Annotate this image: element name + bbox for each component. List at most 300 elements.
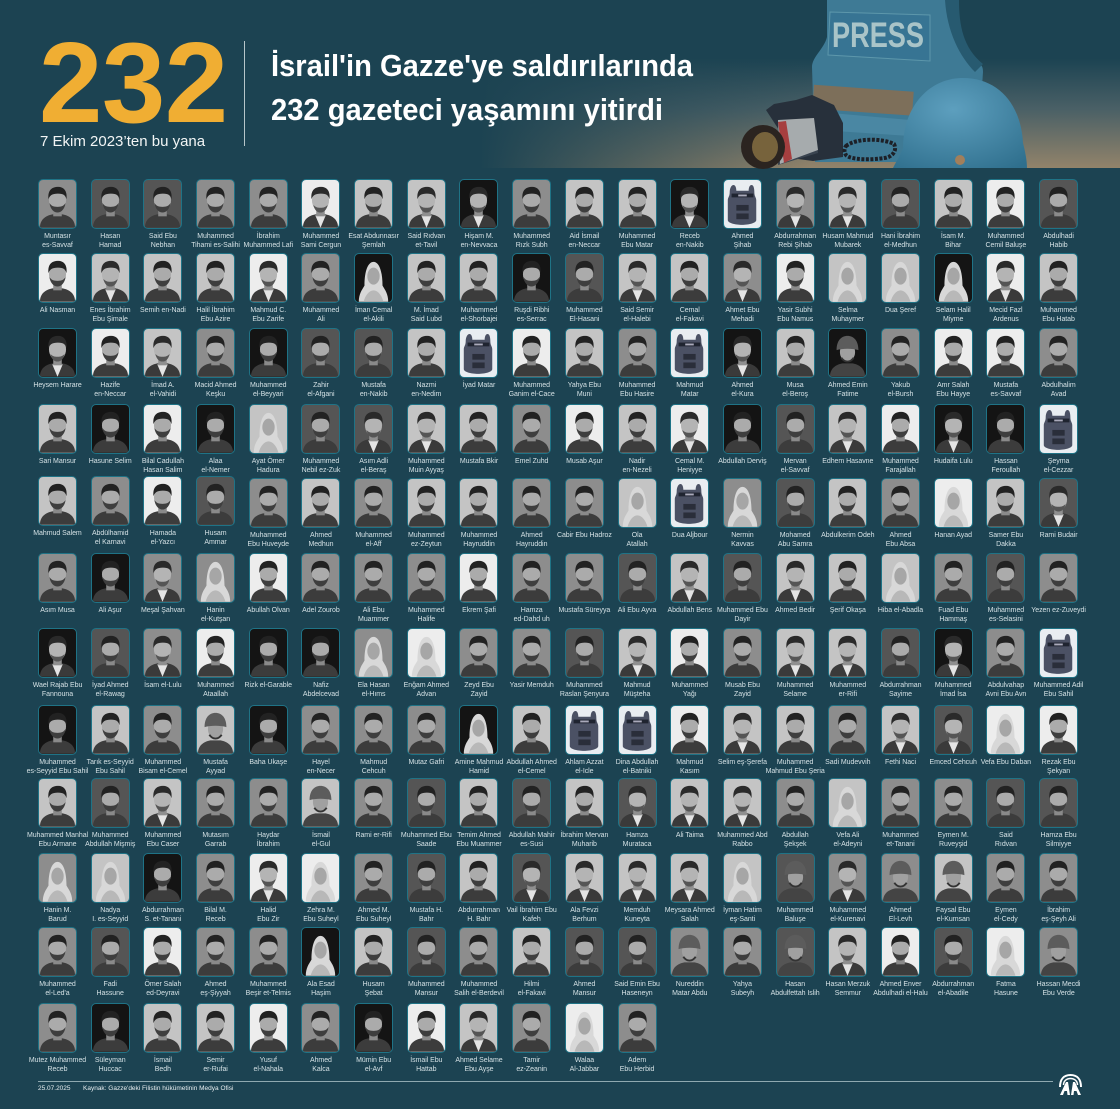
- portrait: Süleyman Huccac: Süleyman: [95, 1057, 126, 1064]
- portrait: Sari Mansur: [31, 404, 84, 474]
- portrait: İsmail Bedh: Bedh: [155, 1066, 171, 1073]
- portrait: Muhammed Ebu Matar: Muhammed: [619, 233, 655, 240]
- portrait: Ahmed Bedir: Ahmed Bedir: [775, 607, 815, 614]
- portrait: Ömer Salah ed-Deyravi: ed-Deyravi: [146, 990, 180, 997]
- portrait: Nadya I. es-Seyyid: Nadya: [100, 907, 120, 914]
- portrait: Muhammed es-Selasini: [980, 553, 1032, 623]
- portrait: Mustafa Bkir: Mustafa Bkir: [460, 458, 498, 465]
- portrait: Rami er-Rifi: [347, 778, 400, 848]
- portrait: Muhammed Ebu Hasire: Muhammed: [619, 382, 655, 389]
- portrait: Vefa Ali el-Adeyni: [821, 778, 874, 848]
- portrait: Ruşdi Ribhi es-Serrac: [512, 253, 551, 323]
- portrait: Muhammed Muin Ayyaş: Muin Ayyaş: [409, 467, 444, 474]
- portrait: Hudaifa Lulu: Hudaifa Lulu: [934, 458, 973, 465]
- portrait: Muntasır es-Savvaf: es-Savvaf: [42, 242, 73, 249]
- portrait: Faysal Ebu el-Kumsan: Faysal Ebu: [936, 907, 970, 914]
- portrait: Yusuf el-Nahala: el-Nahala: [253, 1066, 283, 1073]
- portrait: Muhammed Tihami es-Salihi: Muhammed: [197, 233, 234, 240]
- portrait: Mustafa Bkir: [453, 404, 505, 474]
- portrait: Ahmed Selame Ebu Ayşe: Ahmed Selame: [455, 1057, 503, 1064]
- portrait: İmad A. el-Vahidi: el-Vahidi: [150, 391, 176, 398]
- portrait: Esat Abdunnasır Şemlah: [348, 179, 399, 249]
- portrait: Muhammed el-Beyyari: Muhammed: [250, 382, 287, 389]
- portrait: Muhammed Manhal Ebu Armane: Ebu Armane: [38, 841, 77, 848]
- portrait: Muhammed Ebu Hatab: [1032, 253, 1085, 323]
- portrait: Muhammed et-Tanani: [874, 778, 927, 848]
- portrait: Muhammed es-Selasini: es-Selasini: [989, 616, 1023, 623]
- portrait: Amine Mahmud Hamid: [453, 705, 505, 775]
- portrait: Muhammed Selame: [769, 628, 821, 698]
- portrait: Muhammed el-Beyyari: [242, 328, 295, 398]
- portrait: Nadir en-Nezeli: Nadir: [629, 458, 645, 465]
- portrait: Abdurrahman H. Bahr: [453, 853, 505, 923]
- portrait: Zahir el-Afgani: el-Afgani: [307, 391, 335, 398]
- portrait: Husam Şebat: [347, 927, 400, 997]
- portrait: Wael Rajab Ebu Fannouna: Fannouna: [42, 691, 73, 698]
- portrait: Mustafa Ayyad: [189, 705, 242, 775]
- portrait: Hilmi el-Fakavi: Hilmi: [524, 981, 539, 988]
- portrait: Muhammed er-Rifi: Muhammed: [830, 682, 866, 689]
- portrait: Sadi Mudevvih: Sadi Mudevvih: [825, 759, 870, 766]
- portrait: Musa el-Beroş: [769, 328, 821, 398]
- portrait: Yezen ez-Zuveydi: [1032, 553, 1085, 623]
- portrait: Zehra M. Ebu Suheyl: Zehra M.: [307, 907, 335, 914]
- portrait: Muhammed Ganim el-Cace: Muhammed: [513, 382, 550, 389]
- portrait: Memduh Kuneyta: [611, 853, 663, 923]
- portrait: Nadya I. es-Seyyid: [84, 853, 137, 923]
- portrait: Hamza Ebu Silmiyye: [1032, 778, 1085, 848]
- portrait: Musa el-Beroş: el-Beroş: [782, 391, 808, 398]
- portrait: Said Semir el-Halebi: el-Halebi: [623, 316, 651, 323]
- portrait: İmad A. el-Vahidi: [137, 328, 189, 398]
- portrait: Nazmi en-Nedim: Nazmi: [417, 382, 436, 389]
- row 12: [31, 1003, 1085, 1073]
- portrait: Ali Ebu Muammer: Muammer: [358, 616, 389, 623]
- portrait: Mervan el-Savvaf: Mervan: [784, 458, 807, 465]
- portrait: Mutasım Garrab: Mutasım: [202, 832, 229, 839]
- portrait: Nadya I. es-Seyyid: I. es-Seyyid: [92, 916, 128, 923]
- portrait: Abdülhamid el Karnavi: el Karnavi: [95, 539, 126, 546]
- portrait: Abdullah Mahir es-Susi: [505, 778, 558, 848]
- portrait: Muhammed es-Selasini: Muhammed: [988, 607, 1024, 614]
- portrait: Hudaifa Lulu: [927, 404, 980, 474]
- portrait: Nermin Kavvas: Kavvas: [731, 541, 754, 548]
- portrait: Fuad Ebu Hammaş: Hammaş: [939, 616, 967, 623]
- vertical divider: [244, 41, 245, 146]
- portrait: Nafiz Abdelcevad: Nafiz: [313, 682, 329, 689]
- portrait: Abullah Olvan: [242, 553, 295, 623]
- portrait: İbrahim Mervan Muharib: Muharib: [572, 841, 597, 848]
- portrait: Ela Hasan el-Hıms: el-Hıms: [362, 691, 386, 698]
- portrait: Alaa el-Nemer: Alaa: [209, 458, 222, 465]
- portrait: Muhammed Ali: Muhammed: [303, 307, 339, 314]
- portrait: Muhammed el-Led'a: el-Led'a: [45, 990, 70, 997]
- portrait: Mustafa es-Savvaf: [980, 328, 1032, 398]
- portrait: Abdullah Şekşek: Şekşek: [784, 841, 806, 848]
- portrait: İbrahim Muhammed Lafi: Muhammed Lafi: [243, 242, 293, 249]
- portrait: İbrahim Muhammed Lafi: [243, 179, 293, 249]
- portrait: Muhammed Selame: Muhammed: [777, 682, 813, 689]
- portrait: Ahmed Medhun: [295, 478, 347, 548]
- portrait: Abdullah Ahmed el-Cemel: el-Cemel: [518, 768, 545, 775]
- portrait: Hanin M. Barud: Hanin M.: [44, 907, 71, 914]
- portrait: Muhammed Rızk Subh: Muhammed: [513, 233, 550, 240]
- portrait: Temim Ahmed Ebu Muammer: Ebu Muammer: [456, 841, 502, 848]
- portrait: Rami Budair: Rami Budair: [1040, 532, 1078, 539]
- portrait: Yahya Subeyh: Yahya: [733, 981, 752, 988]
- portrait: Hanan Ayad: [927, 478, 980, 548]
- portrait: İyad Matar: İyad Matar: [463, 382, 495, 389]
- portrait: Hasan Hamad: Hasan: [100, 233, 120, 240]
- row 10: [31, 853, 1085, 923]
- portrait: Abdurrahman el-Abadile: Abdurrahman: [932, 981, 974, 988]
- portrait: Sari Mansur: Sari Mansur: [39, 458, 76, 465]
- portrait: Ahmed Enver Abdulhadi el-Halu: Abdulhadi el-Halu: [873, 990, 928, 997]
- portrait: Husam Mahmud Mubarek: Husam Mahmud: [822, 233, 873, 240]
- portrait: Ahmed el-Kura: Ahmed: [731, 382, 753, 389]
- portrait: Mümin Ebu el-Avf: Mümin Ebu: [356, 1057, 391, 1064]
- portrait: Haydar İbrahim: [242, 778, 295, 848]
- portrait: Esat Abdunnasır Şemlah: Şemlah: [362, 242, 385, 249]
- portrait: Temim Ahmed Ebu Muammer: Temim Ahmed: [457, 832, 501, 839]
- portrait: Dua Şeref: [874, 253, 927, 323]
- portrait: İsam el-Lulu: [137, 628, 189, 698]
- portrait: İsam el-Lulu: İsam el-Lulu: [144, 682, 182, 689]
- row 2: [38, 253, 1078, 323]
- portrait: Muhammed Abd Rabbo: Rabbo: [732, 841, 753, 848]
- portrait: İsmail Bedh: İsmail: [154, 1057, 172, 1064]
- portrait: Hamza ed-Dahduh: [505, 553, 558, 623]
- portrait: Ala Esad Haşim: Haşim: [311, 990, 331, 997]
- row 9: [31, 778, 1085, 848]
- portrait: Muhammed Ebu Dayir: Muhammed Ebu: [717, 607, 768, 614]
- portrait: Muhammed İmad İsa: [927, 628, 980, 698]
- portrait: Ola Atallah: [611, 478, 663, 548]
- portrait: Ayat Ömer Hadura: Hadura: [257, 467, 280, 474]
- portrait: Rezak Ebu Şekyan: Şekyan: [1047, 768, 1070, 775]
- portrait: Muhammed Cemil Baluşe: Muhammed: [988, 233, 1024, 240]
- portrait: İbrahim eş-Şeyh Ali: İbrahim: [1047, 907, 1070, 914]
- portrait: Muhammed Hayruddin: [453, 478, 505, 548]
- portrait: Ali Ebu Muammer: [347, 553, 400, 623]
- portrait: Mecid Fazl Ardenus: [980, 253, 1032, 323]
- portrait: Walaa Al-Jabbar: [558, 1003, 611, 1073]
- portrait: Muhammed Ataallah: Ataallah: [203, 691, 228, 698]
- portrait: Vefa Ebu Daban: [980, 705, 1032, 775]
- portrait: Muhammed Mahmud Ebu Şeria: [769, 705, 821, 775]
- portrait: Süleyman Huccac: Huccac: [99, 1066, 122, 1073]
- portrait: Muhammed el-Led'a: [31, 927, 84, 997]
- portrait: Said Emin Ebu Haseneyn: [611, 927, 663, 997]
- portrait: Semir er-Rufai: [189, 1003, 242, 1073]
- portrait: Adel Zourob: Adel Zourob: [302, 607, 340, 614]
- portrait: Temim Ahmed Ebu Muammer: [453, 778, 505, 848]
- portrait: Abdullah Ahmed el-Cemel: [505, 705, 558, 775]
- portrait: Yakub el-Bursh: el-Bursh: [888, 391, 913, 398]
- portrait: Hişam M. en-Nevvaca: [459, 179, 498, 249]
- portrait: Fatma Hasune: Fatma: [996, 981, 1016, 988]
- portrait: İsmail el-Gul: İsmail: [312, 832, 330, 839]
- portrait: Yusuf el-Nahala: [242, 1003, 295, 1073]
- portrait: Muhammed Abd Rabbo: [716, 778, 769, 848]
- portrait: Muhammed Hayruddin: Muhammed: [461, 532, 497, 539]
- portrait: Muhammed Ganim el-Cace: [505, 328, 558, 398]
- portrait: Mustafa H. Bahr: [400, 853, 453, 923]
- portrait: Abdulhalim Avad: [1032, 328, 1085, 398]
- portrait: Heysem Harare: Heysem Harare: [33, 382, 82, 389]
- portrait: Ahmet Ebu Mehadi: Ahmet Ebu: [725, 307, 760, 314]
- portrait: Mahmud Matar: [663, 328, 716, 398]
- portrait: Eymen el-Cedy: el-Cedy: [994, 916, 1018, 923]
- portrait: Said Rıdvan: Said: [999, 832, 1013, 839]
- portrait: Muhammed Baluşe: [769, 853, 821, 923]
- portrait: Muhammed el-Aff: [347, 478, 400, 548]
- portrait: Yakub el-Bursh: Yakub: [891, 382, 910, 389]
- portrait: İsmail Bedh: [137, 1003, 189, 1073]
- portrait: Abdullah Şekşek: Abdullah: [782, 832, 809, 839]
- portrait: Mustafa H. Bahr: Bahr: [419, 916, 434, 923]
- portrait: Yezen ez-Zuveydi: Yezen ez-Zuveydi: [1031, 607, 1086, 614]
- portrait: Faysal Ebu el-Kumsan: el-Kumsan: [937, 916, 970, 923]
- portrait: Yakub el-Bursh: [874, 328, 927, 398]
- portrait: Ahmed Emin Fatime: Fatime: [837, 391, 858, 398]
- portrait: Said Emin Ebu Haseneyn: Said Emin Ebu: [614, 981, 660, 988]
- portrait: Muhammed Salih el-Berdevil: [453, 927, 505, 997]
- camera: [741, 95, 895, 169]
- portrait: Ala Fevzi Berhum: Berhum: [572, 916, 596, 923]
- portrait: M. İmad Said Lubd: [407, 253, 446, 323]
- portrait: Selma Muhaymer: Muhaymer: [831, 316, 864, 323]
- portrait: Asım Musa: [31, 553, 84, 623]
- portrait: Ahmed Kalca: Kalca: [312, 1066, 330, 1073]
- portrait: Said Semir el-Halebi: [618, 253, 657, 323]
- portrait: Hamza Ebu Silmiyye: Silmiyye: [1046, 841, 1071, 848]
- portrait: Muhammed el-Shorbajei: el-Shorbajei: [461, 316, 497, 323]
- portrait: Ahmed M. Ebu Suheyl: Ebu Suheyl: [356, 916, 391, 923]
- portrait: Ahlam Azzat el-Icle: [558, 705, 611, 775]
- portrait: Muhammed Beşir et-Telmis: Muhammed: [250, 981, 287, 988]
- portrait: Meysara Ahmed Salah: [663, 853, 716, 923]
- portrait: Abdullah Mahir es-Susi: es-Susi: [520, 841, 543, 848]
- portrait: Muhammed El-Hasani: Muhammed: [566, 307, 603, 314]
- portrait: Emel Zuhd: [505, 404, 558, 474]
- portrait: Nermin Kavvas: [716, 478, 769, 548]
- portrait: Bilal M. Receb: Bilal M.: [204, 907, 227, 914]
- portrait: Vefa Ali el-Adeyni: Vefa Ali: [836, 832, 859, 839]
- portrait: Muhammed Ebu Matar: [618, 179, 657, 249]
- portrait: Abdurrahman el-Abadile: el-Abadile: [938, 990, 968, 997]
- portrait: Ahmed Enver Abdulhadi el-Halu: Ahmed Enver: [880, 981, 921, 988]
- portrait: Zeyd Ebu Zayid: [453, 628, 505, 698]
- portrait: Hamada el-Yazcı: [137, 476, 189, 546]
- portrait: Receb en-Nakib: en-Nakib: [676, 242, 704, 249]
- portrait: Muhammed Ataallah: [189, 628, 242, 698]
- portrait: Tarık es-Seyyid Ebu Sahil: [84, 705, 137, 775]
- portrait: Hanin el-Kutşan: el-Kutşan: [201, 616, 230, 623]
- portrait: Eymen el-Cedy: [980, 853, 1032, 923]
- portrait: Mahmud Cehcuh: Mahmud: [360, 759, 387, 766]
- portrait: Selam Halil Miyme: [927, 253, 980, 323]
- portrait: Muhammed Rızk Subh: Rızk Subh: [516, 242, 548, 249]
- row 11: [31, 927, 1085, 997]
- portrait: Hamza Murataca: Murataca: [623, 841, 651, 848]
- portrait: Alaa el-Nemer: el-Nemer: [201, 467, 230, 474]
- portrait: Walaa Al-Jabbar: Walaa: [575, 1057, 594, 1064]
- portrait: Abdulhadi Habib: Abdulhadi: [1043, 233, 1074, 240]
- portrait: Ahmed Emin Fatime: Ahmed Emin: [828, 382, 868, 389]
- portrait: Abdulkerim Odeh: Abdulkerim Odeh: [821, 532, 874, 539]
- portrait: Receb en-Nakib: [670, 179, 709, 249]
- portrait: Abdurrahman Sayime: Abdurrahman: [880, 682, 921, 689]
- portrait: Ahmed Şihab: [723, 179, 762, 249]
- portrait: Muhammed Farajallah: [874, 404, 927, 474]
- portrait: Yasir Memduh: [505, 628, 558, 698]
- portrait: Abullah Olvan: Abullah Olvan: [247, 607, 290, 614]
- portrait: Halid Ebu Zir: Halid: [260, 907, 276, 914]
- portrait: Vail İbrahim Ebu Kafeh: [505, 853, 558, 923]
- portrait: Abdulvahap Avni Ebu Avn: Avni Ebu Avn: [985, 691, 1026, 698]
- row 8: [31, 705, 1085, 775]
- portrait: Enes İbrahim Ebu Şimale: Enes İbrahim: [90, 307, 131, 314]
- portrait: Mahmud Kasım: Mahmud: [676, 759, 703, 766]
- portrait: Abdurrahman Sayime: Sayime: [889, 691, 912, 698]
- portrait: Muhammed El-Hasani: [565, 253, 604, 323]
- portrait: Hassan Mecdi Ebu Verde: Hassan Mecdi: [1037, 981, 1080, 988]
- portrait: Fuad Ebu Hammaş: [927, 553, 980, 623]
- portrait: Mustafa en-Nakib: Mustafa: [361, 382, 386, 389]
- portrait: Ali Taima: [663, 778, 716, 848]
- portrait: Ala Fevzi Berhum: [558, 853, 611, 923]
- portrait: Husam Ammar: [189, 476, 242, 546]
- portrait: Muntasır es-Savvaf: Muntasır: [44, 233, 71, 240]
- portrait: Nazmi en-Nedim: en-Nedim: [411, 391, 441, 398]
- portrait: Ahmed eş-Şiyyah: [189, 927, 242, 997]
- portrait: Mustafa es-Savvaf: Mustafa: [994, 382, 1018, 389]
- portrait: Abdulhadi Habib: Habib: [1050, 242, 1068, 249]
- portrait: Muhammed Raslan Şenyura: Raslan Şenyura: [560, 691, 609, 698]
- portrait: Ahmed Ebu Absa: Ebu Absa: [886, 541, 915, 548]
- portrait: Yahya Ebu Muni: Muni: [577, 391, 592, 398]
- portrait: Mutez Muhammed Receb: [31, 1003, 84, 1073]
- portrait: Musab Ebu Zayid: Musab Ebu: [725, 682, 760, 689]
- portrait: İman Cemal el-Akili: İman Cemal: [355, 307, 392, 314]
- portrait: Muhammed Ali: Ali: [317, 316, 325, 323]
- portrait: Abdullah Derviş: Abdullah Derviş: [718, 458, 767, 465]
- portrait: Samer Ebu Dakka: Dakka: [996, 541, 1016, 548]
- portrait: Vefa Ali el-Adeyni: el-Adeyni: [833, 841, 862, 848]
- portrait: Hasune Selim: Hasune Selim: [89, 458, 132, 465]
- portrait: Eymen M. Ruveyşid: [927, 778, 980, 848]
- portrait: Muhammed Baluşe: Baluşe: [785, 916, 806, 923]
- portrait: Ahmed eş-Şiyyah: Ahmed: [205, 981, 227, 988]
- portrait: Muhammed Halife: Halife: [418, 616, 435, 623]
- row 6: [31, 553, 1085, 623]
- portrait: Husam Şebat: Husam: [363, 981, 385, 988]
- portrait: Faysal Ebu el-Kumsan: [927, 853, 980, 923]
- portrait: Nafiz Abdelcevad: Abdelcevad: [303, 691, 339, 698]
- portrait: Muhammed Cemil Baluşe: [986, 179, 1026, 249]
- portrait: Husam Şebat: Şebat: [365, 990, 383, 997]
- portrait: Said Semir el-Halebi: Said Semir: [620, 307, 654, 314]
- portrait: Mustafa en-Nakib: en-Nakib: [360, 391, 387, 398]
- portrait: Hasan Hamad: [91, 179, 130, 249]
- portrait: İmad A. el-Vahidi: İmad A.: [151, 382, 175, 389]
- portrait: Hasan Abdulfettah Islih: Abdulfettah Islih: [771, 990, 820, 997]
- portrait: Mohamed Abu Samra: Abu Samra: [778, 541, 812, 548]
- portrait: Muhammed Ebu Caser: [137, 778, 189, 848]
- portrait: Hassan Feroullah: Feroullah: [992, 467, 1020, 474]
- row 5: [31, 478, 1085, 548]
- portrait: Hamada el-Yazcı: el-Yazcı: [151, 539, 175, 546]
- portrait: Said Rıdvan et-Tavil: [407, 179, 446, 249]
- portrait: Ali Ebu Ayva: [611, 553, 663, 623]
- portrait: Muhammed Adil Ebu Sahil: Ebu Sahil: [1044, 691, 1073, 698]
- portrait: Hamza Murataca: Hamza: [626, 832, 648, 839]
- portrait: Muhammed Selame: Selame: [783, 691, 807, 698]
- big number: 232: [39, 20, 228, 147]
- portrait: Ali Ebu Ayva: Ali Ebu Ayva: [618, 607, 656, 614]
- portrait: Abdullah Şekşek: [769, 778, 821, 848]
- portrait: Ruşdi Ribhi es-Serrac: es-Serrac: [517, 316, 547, 323]
- portrait: M. İmad Said Lubd: Said Lubd: [411, 316, 442, 323]
- portrait: Samer Ebu Dakka: Samer Ebu: [989, 532, 1023, 539]
- portrait: Muhammed Manhal Ebu Armane: Muhammed Manhal: [27, 832, 88, 839]
- portrait: Hiba el-Abadla: Hiba el-Abadla: [878, 607, 923, 614]
- portrait: Mahmud Müşteha: Müşteha: [624, 691, 650, 698]
- portrait: Abdullah Ahmed el-Cemel: Abdullah Ahmed: [507, 759, 557, 766]
- portrait: Cabir Ebu Hadroz: Cabir Ebu Hadroz: [557, 532, 612, 539]
- portrait: Ola Atallah: Ola: [632, 532, 642, 539]
- portrait: Mohamed Abu Samra: Mohamed: [780, 532, 811, 539]
- portrait: Muhammed Abd Rabbo: Muhammed Abd: [717, 832, 768, 839]
- portrait: Ali Taima: Ali Taima: [676, 832, 704, 839]
- portrait: Muhammed Ebu Hatab: Muhammed: [1040, 307, 1077, 314]
- portrait: Mahmud Matar: Mahmud: [676, 382, 703, 389]
- portrait: Abdurrahman S. et-Tanani: S. et-Tanani: [144, 916, 181, 923]
- portrait: Ahmed El-Levh: El-Levh: [889, 916, 912, 923]
- portrait: Hanin el-Kutşan: [189, 553, 242, 623]
- portrait: Wael Rajab Ebu Fannouna: [31, 628, 84, 698]
- portrait: Ahmed Medhun: Ahmed: [310, 532, 332, 539]
- portrait: İyad Matar: [453, 328, 505, 398]
- portrait: Mahmud C. Ebu Zarife: [249, 253, 288, 323]
- portrait: Hamada el-Yazcı: Hamada: [150, 530, 176, 537]
- portrait: Fatma Hasune: Hasune: [994, 990, 1018, 997]
- portrait: Adem Ebu Herbid: [611, 1003, 663, 1073]
- portrait: Bilal M. Receb: [189, 853, 242, 923]
- portrait: Mustafa Süreyya: Mustafa Süreyya: [558, 607, 610, 614]
- portrait: Musab Ebu Zayid: [716, 628, 769, 698]
- portrait: Muhammed Ganim el-Cace: Ganim el-Cace: [509, 391, 555, 398]
- portrait: Memduh Kuneyta: Kuneyta: [624, 916, 650, 923]
- portrait: Hazife en-Neccar: [84, 328, 137, 398]
- portrait: Fadi Hassune: Hassune: [97, 990, 124, 997]
- portrait: İbrahim Muhammed Lafi: İbrahim: [257, 233, 280, 240]
- portrait: Mutasım Garrab: Garrab: [205, 841, 226, 848]
- portrait: İyman Hatim eş-Santi: [716, 853, 769, 923]
- portrait: Muhammed Halife: Muhammed: [408, 607, 445, 614]
- portrait: Muhammed Raslan Şenyura: Muhammed: [566, 682, 603, 689]
- portrait: Şerif Okaşa: [821, 553, 874, 623]
- portrait: Husam Ammar: Ammar: [204, 539, 227, 546]
- portrait: Muhammed Rızk Subh: [512, 179, 551, 249]
- portrait: Muhammed Farajallah: Farajallah: [885, 467, 916, 474]
- portrait: Ömer Salah ed-Deyravi: Ömer Salah: [144, 981, 181, 988]
- portrait: Baha Ukaşe: [242, 705, 295, 775]
- portrait: Edhem Hasavne: Edhem Hasavne: [822, 458, 873, 465]
- vest: [812, 0, 983, 162]
- portrait: Sadi Mudevvih: [821, 705, 874, 775]
